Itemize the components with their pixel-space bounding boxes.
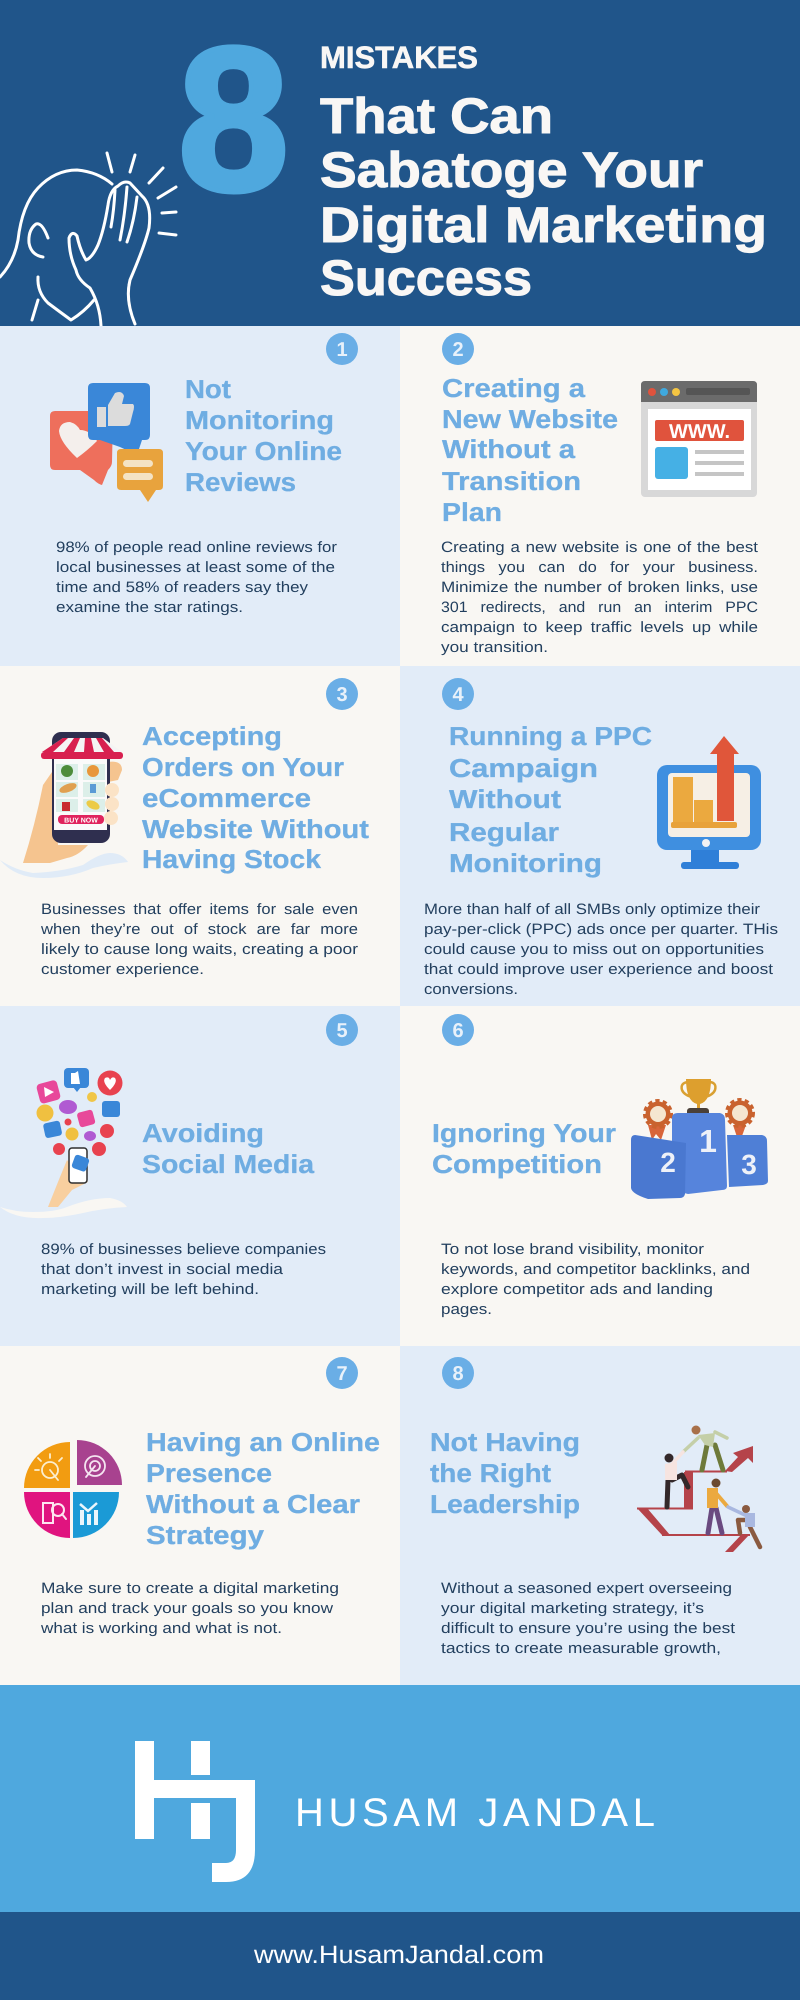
number badge 8: 8 <box>452 1363 464 1385</box>
number badge 4 <box>442 678 474 710</box>
heading: New Website <box>442 404 618 434</box>
heading: Not Having <box>430 1427 580 1457</box>
heading <box>146 1427 380 1550</box>
heading <box>432 1118 616 1179</box>
kicker: mistakes: MISTAKES <box>320 40 478 75</box>
heading <box>185 374 342 497</box>
number badge 5 <box>326 1014 358 1046</box>
body text: Minimize the number of broken links, use <box>441 579 758 596</box>
heading: Reviews <box>185 467 296 497</box>
body text: pay-per-click (PPC) ads once per quarter. THis <box>424 921 778 938</box>
body text: conversions. <box>424 981 518 998</box>
brand name: HUSAM JANDAL <box>295 1791 655 1835</box>
icon: monitor with rising chart <box>657 736 761 869</box>
icon: podium with trophy and rosettes: 1 <box>699 1123 717 1159</box>
icon: podium with trophy and rosettes: 3 <box>741 1149 757 1180</box>
number badge 5: 5 <box>336 1020 348 1042</box>
heading: Without a <box>442 434 576 464</box>
heading: Social Media <box>142 1149 315 1179</box>
heading: Having Stock <box>142 844 322 874</box>
body text: tactics to create measurable growth, <box>441 1640 721 1657</box>
number badge 4: 4 <box>452 684 464 706</box>
heading: Orders on Your <box>142 752 344 782</box>
body text: explore competitor ads and landing <box>441 1281 713 1298</box>
icon: social reaction bubbles <box>50 383 163 502</box>
body text: Businesses that offer items for sale even <box>41 901 358 918</box>
main title: Digital Marketing <box>320 197 767 253</box>
main title: Success <box>320 250 532 306</box>
body text: campaign to keep traffic levels up while <box>441 619 758 636</box>
heading: Without <box>449 784 561 814</box>
heading: Plan <box>442 497 502 527</box>
body text: 98% of people read online reviews for <box>56 539 337 556</box>
body text <box>441 539 759 656</box>
heading <box>449 721 652 878</box>
panel 6: competition <box>400 1006 800 1346</box>
body text <box>41 1241 326 1298</box>
heading: Ignoring Your <box>432 1118 616 1148</box>
body text: likely to cause long waits, creating a poor <box>41 941 358 958</box>
heading: Presence <box>146 1458 272 1488</box>
heading: the Right <box>430 1458 551 1488</box>
body text: time and 58% of readers say they <box>56 579 309 596</box>
icon: hand holding shop phone: BUY NOW <box>64 818 98 824</box>
body text: pages. <box>441 1301 492 1318</box>
body text: things you can do for your business. <box>441 559 758 576</box>
number badge 1 <box>326 333 358 365</box>
heading <box>442 373 618 527</box>
body text: examine the star ratings. <box>56 599 243 616</box>
number badge 8 <box>442 1357 474 1389</box>
body text <box>424 901 778 998</box>
heading <box>142 1118 315 1179</box>
panel 7: clear strategy <box>0 1346 400 1685</box>
heading: Transition <box>442 466 581 496</box>
body text <box>441 1580 736 1657</box>
body text <box>40 901 358 978</box>
body text: More than half of all SMBs only optimize their <box>424 901 760 918</box>
icon: hand with phone and social bubbles <box>0 1068 127 1218</box>
heading: Your Online <box>185 436 342 466</box>
heading: Without a Clear <box>146 1489 360 1519</box>
big number 8: 8 <box>178 5 289 234</box>
heading: Not <box>185 374 231 404</box>
heading: Avoiding <box>142 1118 264 1148</box>
body text: customer experience. <box>41 961 204 978</box>
number badge 7: 7 <box>336 1363 348 1385</box>
logo mark: HJ monogram <box>135 1741 255 1882</box>
heading: Monitoring <box>449 848 602 878</box>
body text: what is working and what is not. <box>40 1620 282 1637</box>
footer website band <box>0 1912 800 2000</box>
heading: Competition <box>432 1149 602 1179</box>
body text: plan and track your goals so you know <box>41 1600 333 1617</box>
heading <box>430 1427 580 1519</box>
body text <box>40 1580 339 1637</box>
heading: Leadership <box>430 1489 580 1519</box>
main title <box>320 88 767 306</box>
icon: podium with trophy and rosettes: 2 <box>660 1147 676 1178</box>
icon: browser window: WWW. <box>669 421 730 443</box>
number badge 7 <box>326 1357 358 1389</box>
body text: 89% of businesses believe companies <box>41 1241 326 1258</box>
number badge 2 <box>442 333 474 365</box>
icon: team climbing steps <box>637 1426 760 1552</box>
panel 5: social media <box>0 1006 400 1346</box>
heading: Strategy <box>146 1520 265 1550</box>
body text: your digital marketing strategy, it’s <box>441 1600 704 1617</box>
number badge 2: 2 <box>452 339 464 361</box>
icon: facepalm line drawing <box>0 153 176 326</box>
icon: hand holding shop phone <box>0 732 128 878</box>
heading: Running a PPC <box>449 721 652 751</box>
body text: Make sure to create a digital marketing <box>41 1580 339 1597</box>
panel 1: online reviews <box>0 326 400 666</box>
body text: you transition. <box>441 639 548 656</box>
body text: difficult to ensure you’re using the best <box>441 1620 736 1637</box>
website url: www.HusamJandal.com <box>253 1941 544 1969</box>
body text: when they’re out of stock are far more <box>40 921 358 938</box>
body text: 301 redirects, and run an interim PPC <box>441 599 758 616</box>
panel 4: ppc monitoring <box>400 666 800 1006</box>
body text: local businesses at least some of the <box>56 559 335 576</box>
panel 3: ecommerce stock <box>0 666 400 1006</box>
panel 8: leadership <box>400 1346 800 1685</box>
heading: Website Without <box>142 814 369 844</box>
heading: Campaign <box>449 753 598 783</box>
body text: keywords, and competitor backlinks, and <box>441 1261 750 1278</box>
number badge 3 <box>326 678 358 710</box>
icon: podium with trophy and rosettes <box>631 1079 768 1199</box>
body text <box>441 1241 750 1318</box>
heading: Regular <box>449 817 559 847</box>
heading: Monitoring <box>185 405 334 435</box>
main title: That Can <box>320 88 553 144</box>
body text: Without a seasoned expert overseeing <box>441 1580 732 1597</box>
heading: eCommerce <box>142 783 311 813</box>
main title: Sabatoge Your <box>320 142 703 198</box>
heading: Accepting <box>142 721 282 751</box>
heading: Creating a <box>442 373 586 403</box>
body text: To not lose brand visibility, monitor <box>441 1241 704 1258</box>
icon: four-part strategy pie <box>24 1440 122 1538</box>
icon: browser window <box>641 381 757 497</box>
heading <box>142 721 369 874</box>
number badge 6: 6 <box>452 1020 464 1042</box>
body text: could cause you to miss out on opportunities <box>424 941 764 958</box>
header banner <box>0 0 800 326</box>
panel 2: new website <box>400 326 800 666</box>
body text: Creating a new website is one of the best <box>441 539 759 556</box>
footer logo band <box>0 1685 800 1912</box>
heading: Having an Online <box>146 1427 380 1457</box>
number badge 6 <box>442 1014 474 1046</box>
number badge 1: 1 <box>336 339 348 361</box>
body text: marketing will be left behind. <box>41 1281 259 1298</box>
body text <box>56 539 337 616</box>
number badge 3: 3 <box>336 684 348 706</box>
body text: that could improve user experience and boost <box>424 961 774 978</box>
body text: that don’t invest in social media <box>41 1261 284 1278</box>
